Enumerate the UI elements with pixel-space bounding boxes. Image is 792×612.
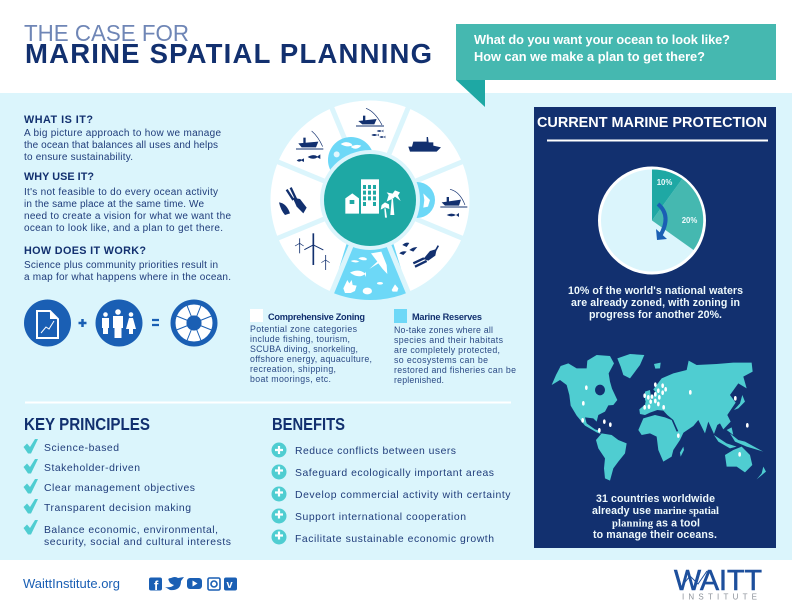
text block: why use it: in the same place at the same time. We	[24, 199, 204, 210]
marine reserve segment	[332, 200, 408, 300]
key principles list: Stakeholder-driven	[44, 463, 140, 474]
ribbon callout: What do you want your ocean to look like?	[474, 32, 730, 47]
title: MARINE SPATIAL PLANNING	[25, 38, 432, 69]
text block: why use it: ocean to look like, and a plan to get there.	[24, 223, 223, 234]
legend: comprehensive zoning: recreation, shipping,	[250, 364, 336, 374]
panel heading: CURRENT MARINE PROTECTION	[537, 115, 767, 131]
icon: fishing boat top	[356, 108, 385, 138]
map pins	[581, 382, 749, 457]
legend: marine reserves: Marine Reserves	[412, 312, 482, 322]
key principles list	[24, 414, 231, 548]
icon: coastal buildings and palms	[345, 179, 401, 218]
text block: why use it: It's not feasible to do every ocean activity	[24, 187, 218, 198]
icon: check marks	[24, 439, 38, 534]
light blue background band	[0, 93, 792, 560]
text block: how does it work: a map for what happens where in the ocean.	[24, 272, 231, 283]
icon: diver left	[279, 188, 307, 215]
legend: marine reserves: so ecosystems can be	[394, 355, 488, 365]
text block: what is it: to ensure sustainability.	[24, 152, 133, 163]
pie caption	[568, 285, 743, 321]
pie caption: 10% of the world's national waters	[568, 285, 743, 297]
social media icons: f	[154, 578, 159, 593]
icon: equals	[152, 320, 159, 325]
panel: current marine protection	[534, 107, 776, 548]
benefits list	[272, 414, 511, 545]
legend: comprehensive zoning: SCUBA diving, snorkeling,	[250, 344, 358, 354]
benefits list: BENEFITS	[272, 414, 345, 434]
social media icons: v	[226, 579, 234, 591]
map caption: as a tool	[656, 518, 700, 530]
key principles list: Transparent decision making	[44, 503, 191, 514]
text block: why use it: WHY USE IT?	[24, 171, 94, 183]
text block: what is it: A big picture approach to how we manage	[24, 128, 221, 139]
icon: fishing boat top left	[296, 131, 323, 162]
ribbon callout	[456, 24, 776, 107]
icon: fishing boat right	[440, 189, 467, 217]
website link: WaittInstitute.org	[23, 576, 120, 591]
benefits list: Reduce conflicts between users	[295, 446, 456, 457]
logo: Waitt Institute: INSTITUTE	[682, 592, 757, 602]
text block: why use it	[24, 171, 231, 234]
icon: ferry ship	[408, 137, 441, 152]
pie chart: 20%	[682, 216, 697, 225]
legend: comprehensive zoning: Comprehensive Zoning	[268, 312, 365, 322]
map caption: marine spatial	[654, 506, 719, 517]
map caption	[592, 493, 719, 541]
legend: marine reserves: species and their habitats	[394, 335, 504, 345]
title: THE CASE FOR	[24, 20, 189, 46]
zoning wheel diagram	[270, 100, 470, 300]
icon: plus	[78, 319, 86, 327]
map caption: already use	[592, 505, 651, 517]
text block: why use it: need to create a vision for what we want the	[24, 211, 231, 222]
pie caption: progress for another 20%.	[589, 309, 722, 321]
benefits list: Support international cooperation	[295, 512, 466, 523]
social media icons	[149, 577, 237, 593]
benefits list: Facilitate sustainable economic growth	[295, 534, 494, 545]
legend: comprehensive zoning: Potential zone categories	[250, 324, 358, 334]
benefits list: Develop commercial activity with certainty	[295, 490, 511, 501]
pie chart	[600, 168, 704, 273]
key principles list: Science-based	[44, 443, 119, 454]
ribbon callout: How can we make a plan to get there?	[474, 49, 705, 64]
icon: diver bottom right	[399, 243, 438, 267]
pie chart: 10%	[657, 178, 672, 187]
equation icons	[24, 300, 218, 346]
wheel activity icons	[279, 108, 467, 270]
legend: comprehensive zoning: include fishing, tourism,	[250, 334, 350, 344]
icon: science document	[24, 300, 71, 346]
icon: zoning wheel	[170, 300, 218, 346]
icon: community people	[96, 300, 142, 346]
world map	[552, 354, 766, 481]
legend: marine reserves: replenished.	[394, 375, 444, 385]
legend: marine reserves: No-take zones where all	[394, 325, 493, 335]
map caption: 31 countries worldwide	[596, 493, 715, 505]
legend: comprehensive zoning	[250, 309, 372, 384]
legend: comprehensive zoning: boat moorings, etc.	[250, 374, 331, 384]
key principles list: KEY PRINCIPLES	[24, 414, 150, 434]
key principles list: Balance economic, environmental,	[44, 525, 218, 536]
key principles list: Clear management objectives	[44, 483, 195, 494]
text block: how does it work	[24, 245, 231, 283]
legend: comprehensive zoning: offshore energy, aquaculture,	[250, 354, 372, 364]
icon: wind turbines	[295, 233, 330, 270]
legend: marine reserves	[394, 309, 516, 385]
reserve blobs	[328, 137, 374, 183]
legend: marine reserves: are completely protected,	[394, 345, 500, 355]
map caption: to manage their oceans.	[593, 529, 717, 541]
legend: marine reserves: restored and fisheries can be	[394, 365, 516, 375]
Hudson Bay	[595, 385, 605, 395]
text block: what is it: the ocean that balances all uses and helps	[24, 140, 218, 151]
text block: what is it: WHAT IS IT?	[24, 114, 93, 126]
key principles list: security, social and cultural interests	[44, 537, 231, 548]
icon: plus circles	[272, 442, 286, 544]
pie caption: are already zoned, with zoning in	[571, 297, 740, 309]
text block: how does it work: Science plus community priorities result in	[24, 260, 218, 271]
benefits list: Safeguard ecologically important areas	[295, 468, 494, 479]
reserve wildlife icons	[334, 142, 430, 294]
text block: what is it	[24, 114, 221, 163]
text block: how does it work: HOW DOES IT WORK?	[24, 245, 146, 257]
title	[24, 20, 432, 69]
logo: Waitt Institute: WAITT	[674, 565, 762, 597]
map caption: planning	[612, 518, 654, 530]
